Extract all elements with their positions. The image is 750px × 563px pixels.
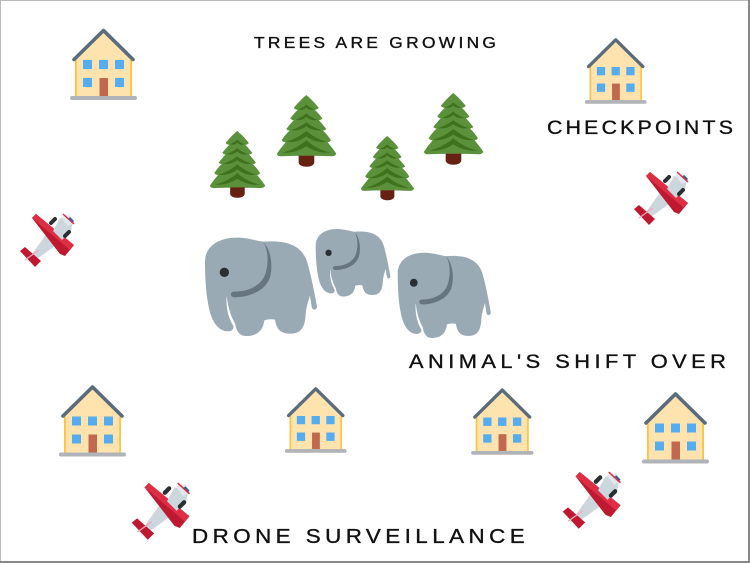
icon: tree 1 [210, 131, 265, 198]
icon: house lower centre [285, 389, 347, 453]
icon: small elephant [316, 229, 390, 297]
icon: plane bottom left [132, 483, 189, 540]
icon: tree 4 [424, 93, 483, 165]
icon: medium elephant [398, 253, 491, 338]
icon: plane top right [634, 172, 688, 225]
label: animal's shift over: ANIMAL'S SHIFT OVER [409, 351, 726, 373]
icon: large elephant [205, 238, 317, 336]
icon: house lower centre right [471, 390, 533, 455]
heading: trees are growing: TREES ARE GROWING [254, 35, 496, 52]
icon: house top left [70, 30, 137, 100]
icon: plane bottom right [563, 472, 620, 529]
icon: house lower left [59, 387, 126, 456]
label: checkpoints: CHECKPOINTS [547, 118, 733, 139]
icon: tree 3 [361, 136, 414, 200]
icon: tree 2 [277, 95, 336, 167]
icon: plane left [20, 214, 74, 267]
icon: house lower right [642, 394, 709, 464]
icon: house top right [585, 40, 647, 104]
label: drone surveillance: DRONE SURVEILLANCE [192, 526, 525, 548]
